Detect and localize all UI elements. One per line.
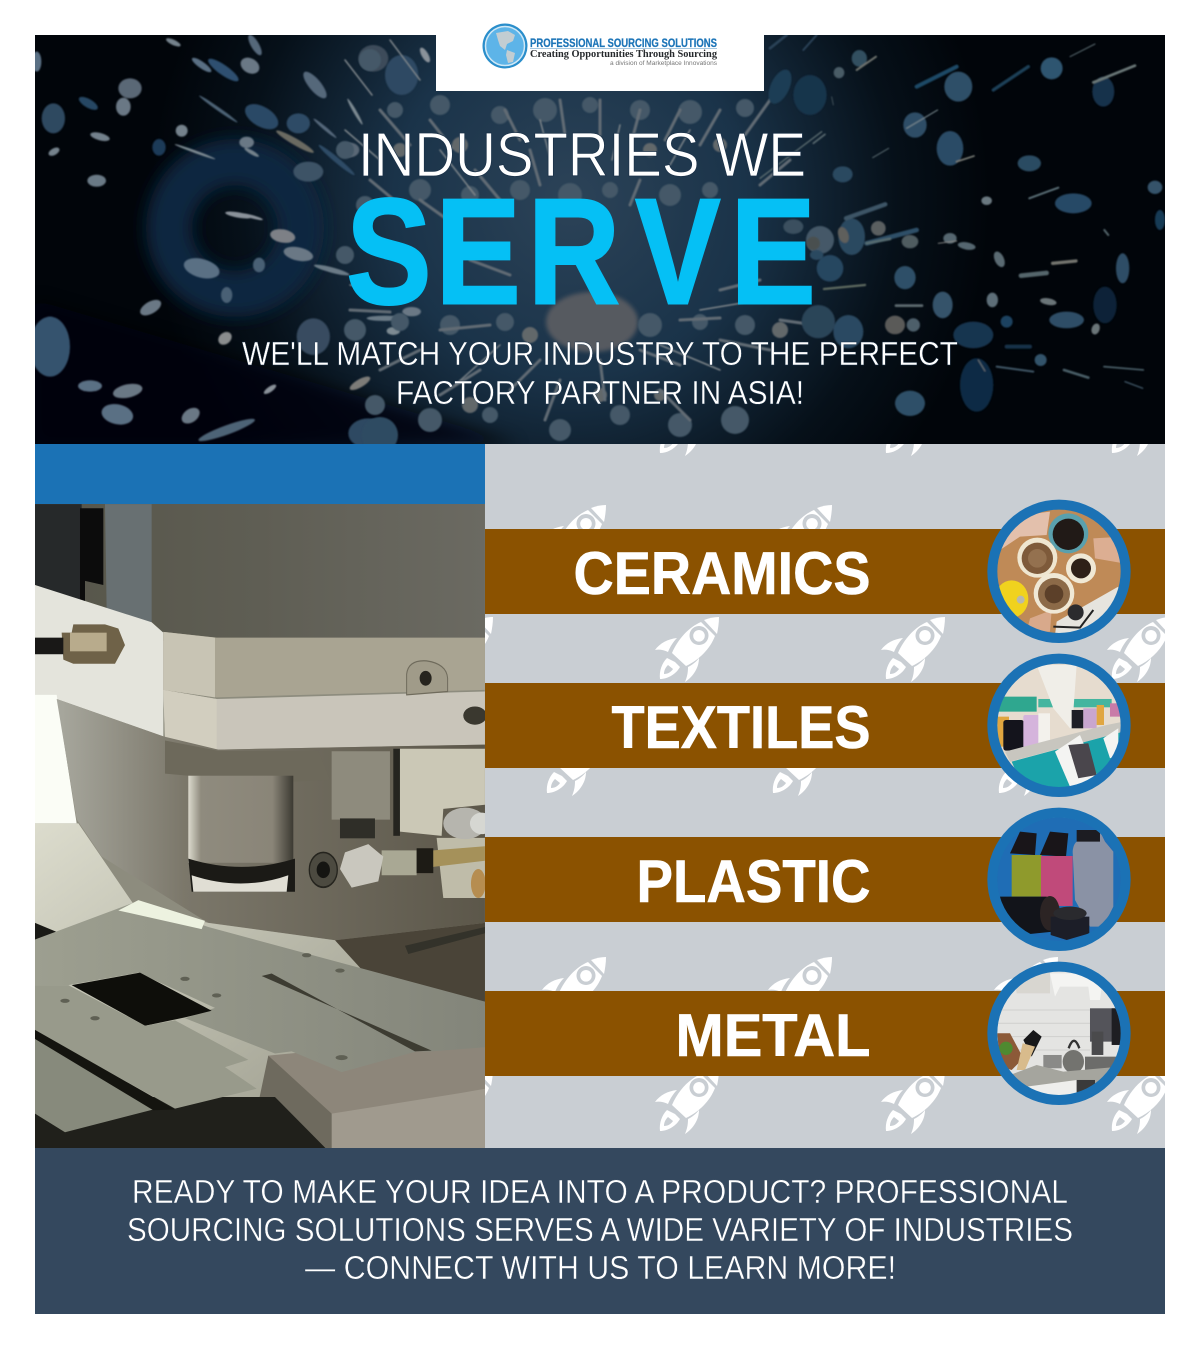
icon: globe — [482, 24, 528, 68]
call to action text: — CONNECT WITH US TO LEARN MORE! — [305, 1249, 896, 1286]
label: metal: METAL — [676, 1002, 870, 1069]
sparks: left half — [30, 33, 432, 448]
icon: textile machine photo — [992, 659, 1127, 795]
band: metal — [485, 967, 1165, 1103]
heading: serve: SERVE — [346, 167, 816, 336]
label: plastic: PLASTIC — [636, 848, 870, 915]
photo: machine tool — [35, 500, 493, 1151]
subheading: FACTORY PARTNER IN ASIA! — [396, 374, 804, 411]
rocket pattern — [485, 444, 1165, 1134]
subheading: WE'LL MATCH YOUR INDUSTRY TO THE PERFECT — [242, 335, 958, 372]
call to action text: SOURCING SOLUTIONS SERVES A WIDE VARIETY OF INDUSTRIES — [127, 1211, 1073, 1248]
panel: categories on rocket pattern — [485, 444, 1165, 1148]
sparks: centre burst — [336, 40, 834, 453]
blue block — [35, 444, 485, 504]
icon: plastic bottles photo — [992, 813, 1127, 947]
icon: metal kitchen photo — [992, 967, 1127, 1103]
call to action text — [127, 1173, 1073, 1286]
band: ceramics — [485, 505, 1165, 638]
panel: call to action footer — [35, 1148, 1165, 1314]
subheading — [242, 335, 958, 411]
logo panel — [436, 24, 764, 91]
logo division line: a division of Marketplace Innovations — [610, 60, 718, 67]
label: textiles: TEXTILES — [612, 694, 870, 761]
band: textiles — [485, 659, 1165, 795]
call to action text: READY TO MAKE YOUR IDEA INTO A PRODUCT? PROFESSIONAL — [132, 1173, 1068, 1210]
heading: industries we: INDUSTRIES WE — [358, 121, 806, 190]
band: plastic — [485, 813, 1165, 947]
logo rule — [530, 47, 717, 50]
icon: ceramic cups photo — [992, 505, 1127, 638]
logo tagline: Creating Opportunities Through Sourcing — [530, 49, 718, 60]
panel: hero background with sparks — [30, 33, 1165, 453]
label: ceramics: CERAMICS — [574, 540, 870, 607]
logo name: PROFESSIONAL SOURCING SOLUTIONS — [530, 38, 717, 50]
sparks: right half — [760, 35, 1165, 416]
